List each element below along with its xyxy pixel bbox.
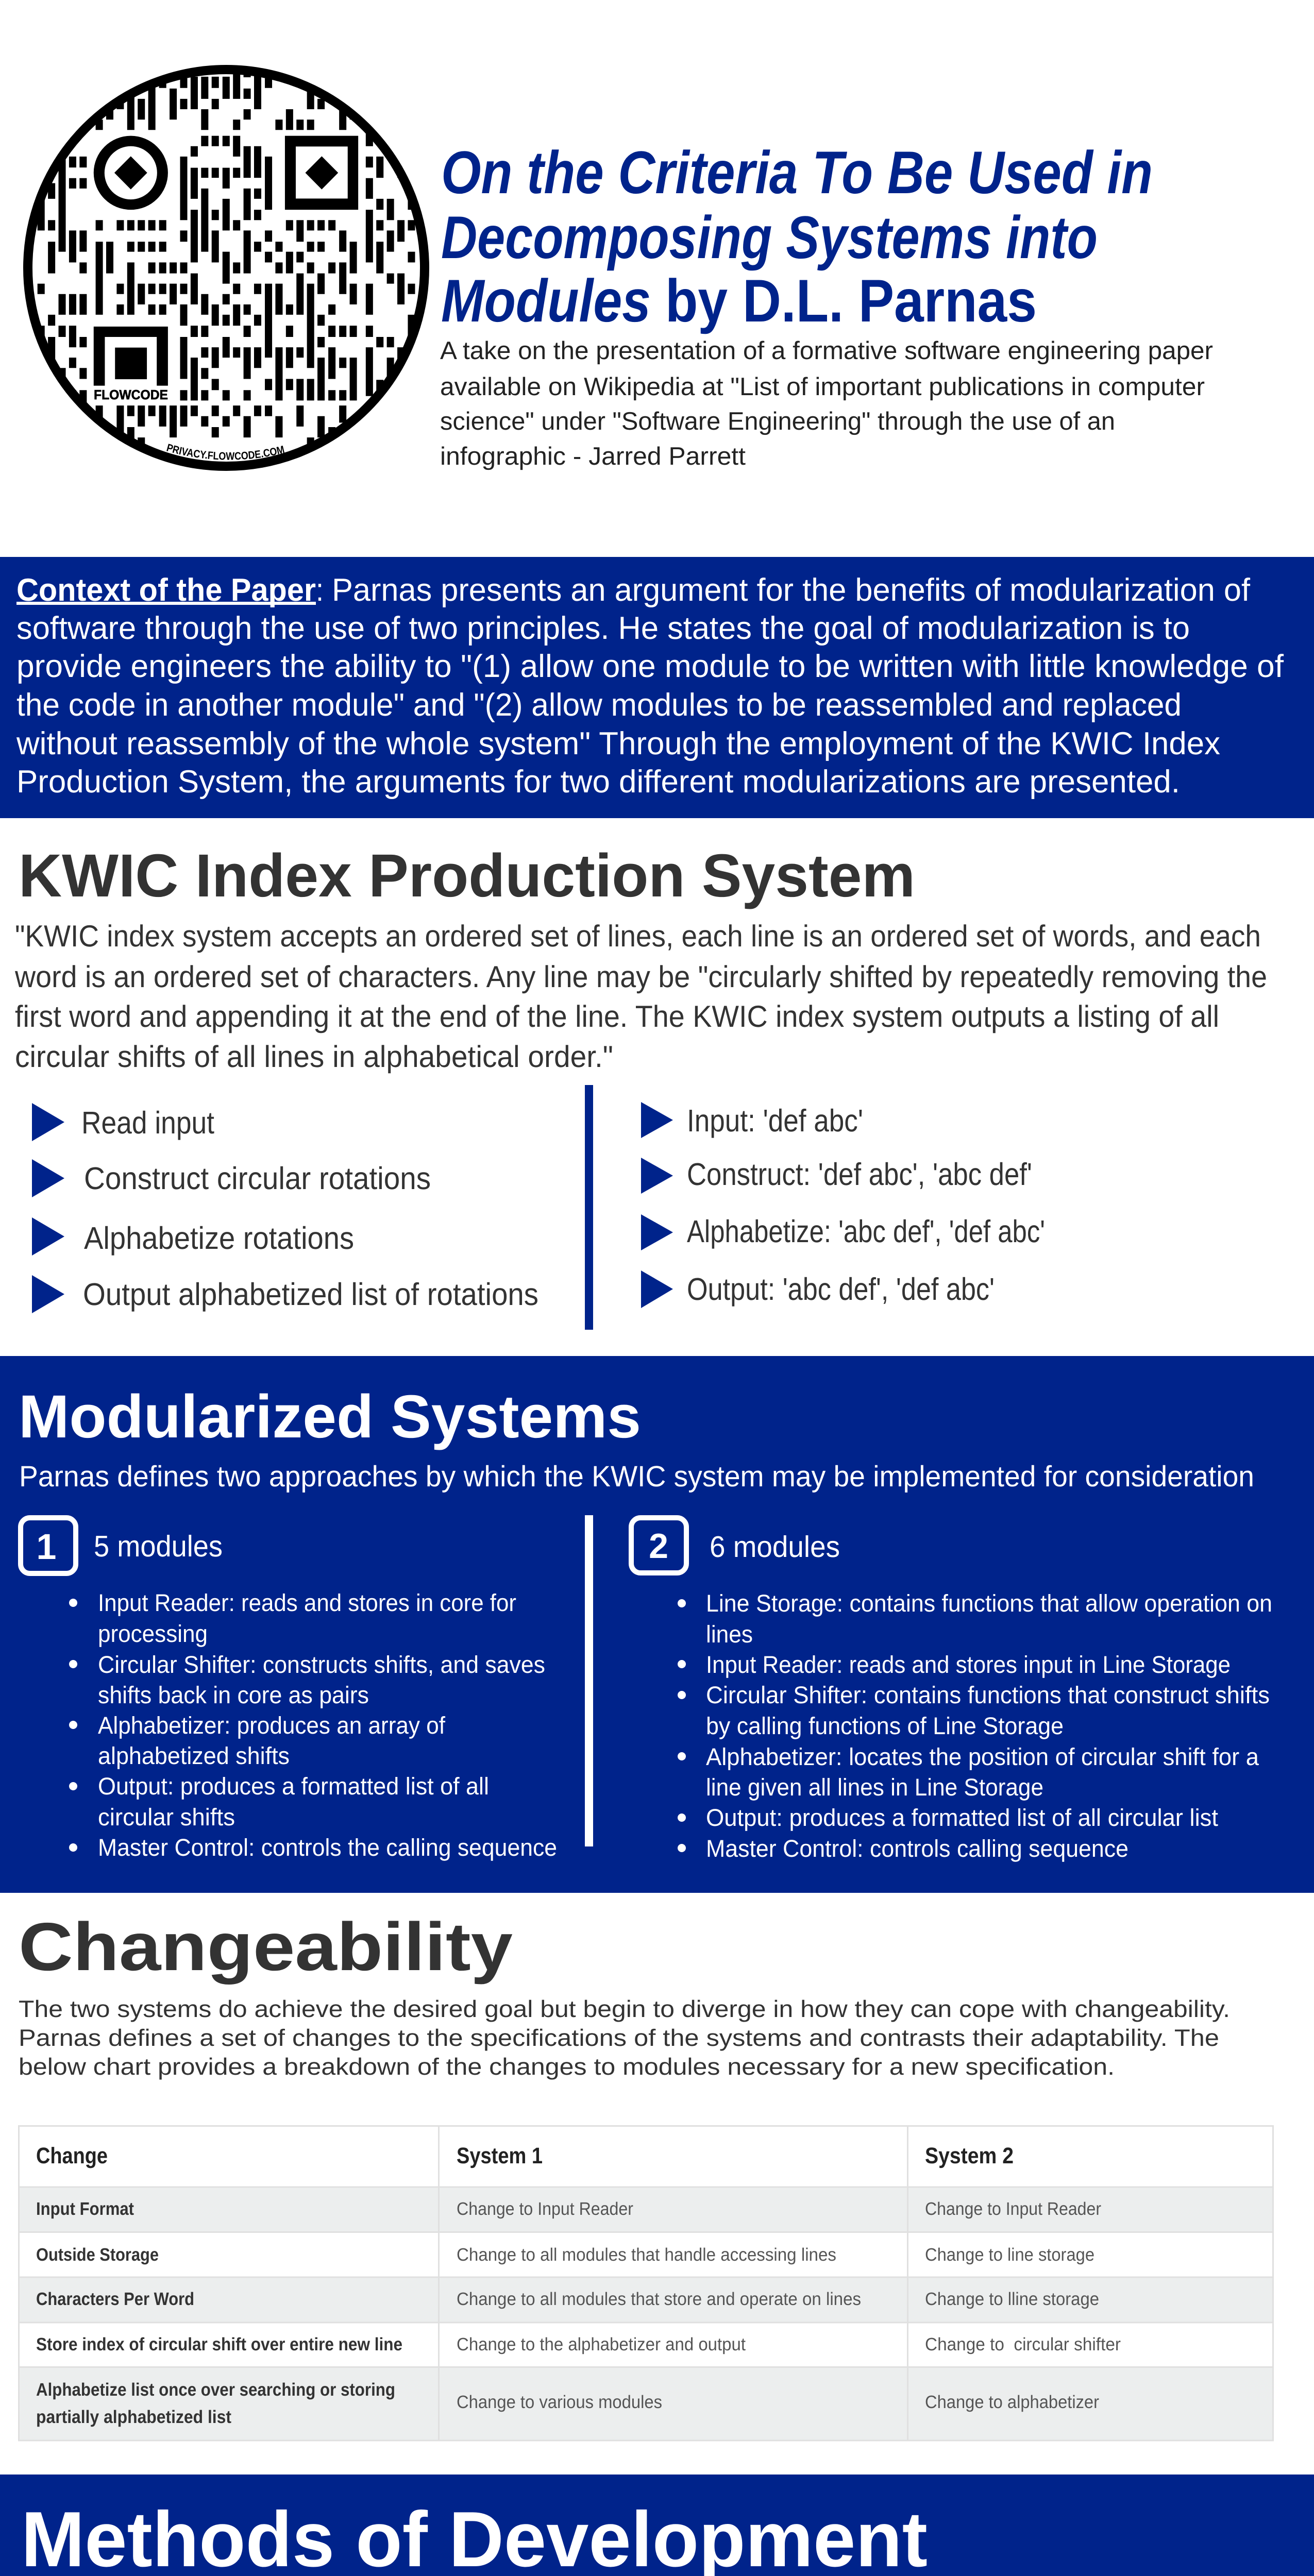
row: characters per word: Change to lline storage — [925, 2289, 1099, 2309]
row: characters per word: Characters Per Word — [36, 2289, 194, 2309]
heading: Changeability: Changeability — [19, 1909, 513, 1985]
icon: arrow 4 — [32, 1275, 64, 1313]
row: alphabetize list once: partially alphabetized list — [36, 2407, 231, 2427]
text block: intro: Parnas defines two approaches by which the KWIC system may be implemented for consideration — [19, 1460, 1254, 1493]
heading: 6 modules: 6 modules — [710, 1530, 840, 1564]
list: system 2 modules: Master Control: controls calling sequence — [706, 1835, 1128, 1862]
example: alphabetize: Alphabetize: 'abc def', 'def abc' — [687, 1214, 1045, 1249]
list: system 2 modules: Circular Shifter: contains functions that construct shifts — [706, 1681, 1270, 1708]
list: system 2 modules: Input Reader: reads and stores input in Line Storage — [706, 1651, 1231, 1678]
table header: System 1 — [457, 2143, 543, 2168]
text block: context paragraph: the code in another module" and "(2) allow modules to be reassembled and replaced — [16, 687, 1182, 723]
icon: arrow 3 — [641, 1214, 673, 1250]
icon: arrow 1 — [32, 1103, 64, 1141]
list: system 2 modules: line given all lines in Line Storage — [706, 1773, 1043, 1801]
subtitle text block: available on Wikipedia at "List of important publications in computer — [440, 373, 1205, 401]
badge: system 1: 1 — [37, 1527, 56, 1567]
list: system 2 modules — [678, 1589, 1272, 1862]
panel: methods of development — [0, 2475, 1314, 2576]
row: input format — [36, 2199, 1101, 2219]
list: process example — [641, 1102, 1045, 1308]
list: system 2 modules: lines — [706, 1620, 753, 1648]
step: construct: Construct circular rotations — [84, 1161, 431, 1196]
panel: modularized systems — [0, 1356, 1314, 1893]
row: alphabetize list once: Change to alphabetizer — [925, 2392, 1099, 2412]
icon: arrow 1 — [641, 1102, 673, 1138]
row: store index: Change to the alphabetizer and output — [457, 2334, 746, 2354]
subtitle text block — [440, 337, 1213, 470]
subtitle text block: science" under "Software Engineering" through the use of an — [440, 408, 1115, 435]
badge: system 1 — [21, 1518, 76, 1573]
title — [441, 139, 1153, 334]
text block: context paragraph: Context of the Paper — [16, 572, 316, 608]
list: system 2 modules: Alphabetizer: locates the position of circular shift for a — [706, 1743, 1259, 1770]
text block: changeability description: The two systems do achieve the desired goal but begin to diverge in how they can cope with changeability. — [19, 1995, 1230, 2022]
text block: context paragraph: software through the use of two principles. He states the goal of modularization is to — [16, 611, 1190, 646]
text block: context paragraph: Parnas presents an argument for the benefits of modularization of — [332, 572, 1251, 608]
icon: arrow 2 — [32, 1159, 64, 1197]
text block: context paragraph: provide engineers the ability to "(1) allow one module to be written with little knowledge of — [16, 649, 1284, 684]
text block: KWIC description: first word and appending it at the end of the line. The KWIC index system outputs a listing of all — [15, 999, 1219, 1033]
icon: circular flowcode QR code: PRIVACY.FLOWCODE.COM — [166, 444, 284, 460]
subtitle text block: infographic - Jarred Parrett — [440, 443, 746, 470]
text block: context paragraph: : — [316, 572, 324, 608]
text block: context paragraph: without reassembly of the whole system" Through the employment of the KWIC Index — [16, 726, 1220, 761]
row: characters per word — [36, 2289, 1099, 2309]
table: changes by system — [19, 2126, 1273, 2441]
list: system 1 modules: Input Reader: reads and stores in core for — [98, 1589, 516, 1616]
row: outside storage — [36, 2245, 1094, 2265]
subtitle text block: A take on the presentation of a formative software engineering paper — [440, 337, 1213, 365]
example: output: Output: 'abc def', 'def abc' — [687, 1272, 995, 1307]
row: characters per word: Change to all modules that store and operate on lines — [457, 2289, 861, 2309]
badge: system 2 — [631, 1518, 686, 1573]
row: outside storage: Change to all modules that handle accessing lines — [457, 2245, 836, 2265]
title: Modules — [441, 267, 651, 334]
icon: arrow 3 — [32, 1217, 64, 1256]
icon: circular flowcode QR code — [23, 65, 429, 471]
heading: Modularized Systems: Modularized Systems — [19, 1383, 641, 1451]
text block: changeability description — [19, 1995, 1230, 2080]
title: Decomposing Systems into — [441, 204, 1098, 271]
row: store index: Change to circular shifter — [925, 2334, 1121, 2354]
row: outside storage: Outside Storage — [36, 2245, 159, 2265]
text block: changeability description: Parnas defines a set of changes to the specifications of the systems and contrasts their adaptability. The — [19, 2024, 1219, 2051]
row: alphabetize list once — [36, 2380, 1099, 2427]
list: system 2 modules: Output: produces a formatted list of all circular list — [706, 1804, 1218, 1831]
row: alphabetize list once: Change to various modules — [457, 2392, 662, 2412]
heading: KWIC Index Production System: KWIC Index Production System — [19, 842, 915, 910]
text block: context paragraph: Production System, the arguments for two different modularizations are presented. — [16, 764, 1180, 800]
list: system 1 modules: Master Control: controls the calling sequence — [98, 1834, 557, 1861]
list: system 2 modules: by calling functions of Line Storage — [706, 1712, 1064, 1739]
example: construct: Construct: 'def abc', 'abc def' — [687, 1157, 1032, 1192]
row: input format: Change to Input Reader — [925, 2199, 1101, 2219]
list: system 1 modules: processing — [98, 1620, 208, 1647]
list: process steps — [32, 1103, 538, 1313]
text block: KWIC description: word is an ordered set of characters. Any line may be "circularly shifted by repeatedly removing the — [14, 960, 1267, 994]
list: system 1 modules: Alphabetizer: produces an array of — [98, 1711, 446, 1739]
row: alphabetize list once: Alphabetize list once over searching or storing — [36, 2380, 395, 2400]
table header — [36, 2143, 1014, 2168]
title: On the Criteria To Be Used in — [441, 139, 1153, 206]
icon: circular flowcode QR code: FLOWCODE — [94, 387, 168, 402]
example: input: Input: 'def abc' — [687, 1103, 863, 1138]
icon: arrow 2 — [641, 1158, 673, 1194]
step: output: Output alphabetized list of rotations — [83, 1277, 538, 1312]
row: store index: Store index of circular shift over entire new line — [36, 2334, 402, 2354]
text block: KWIC description: "KWIC index system accepts an ordered set of lines, each line is an ordered set of words, and each — [15, 919, 1261, 953]
list: system 1 modules: Circular Shifter: constructs shifts, and saves — [98, 1651, 545, 1678]
text block: KWIC description: circular shifts of all lines in alphabetical order." — [15, 1040, 613, 1074]
table header: Change — [36, 2143, 108, 2168]
row: outside storage: Change to line storage — [925, 2245, 1094, 2265]
list: system 1 modules: circular shifts — [98, 1803, 235, 1831]
list: system 1 modules: Output: produces a formatted list of all — [98, 1772, 489, 1800]
list: system 1 modules: shifts back in core as pairs — [98, 1681, 369, 1708]
title: by D.L. Parnas — [665, 267, 1037, 334]
row: input format: Change to Input Reader — [457, 2199, 633, 2219]
heading: 5 modules: 5 modules — [94, 1530, 223, 1563]
list: system 2 modules: Line Storage: contains functions that allow operation on — [706, 1589, 1272, 1617]
row: input format: Input Format — [36, 2199, 134, 2219]
row: store index — [36, 2334, 1121, 2354]
panel: context of the paper — [0, 557, 1314, 818]
step: alphabetize: Alphabetize rotations — [84, 1221, 354, 1256]
list: system 1 modules: alphabetized shifts — [98, 1742, 290, 1769]
table header: System 2 — [925, 2143, 1014, 2168]
list: system 1 modules — [69, 1589, 557, 1861]
text block: changeability description: below chart provides a breakdown of the changes to modules necessary for a new specification. — [19, 2053, 1115, 2080]
text block: KWIC description — [14, 919, 1267, 1074]
step: read input: Read input — [81, 1105, 214, 1140]
text block: context paragraph — [16, 572, 1284, 800]
icon: arrow 4 — [641, 1270, 673, 1308]
badge: system 2: 2 — [649, 1527, 668, 1566]
